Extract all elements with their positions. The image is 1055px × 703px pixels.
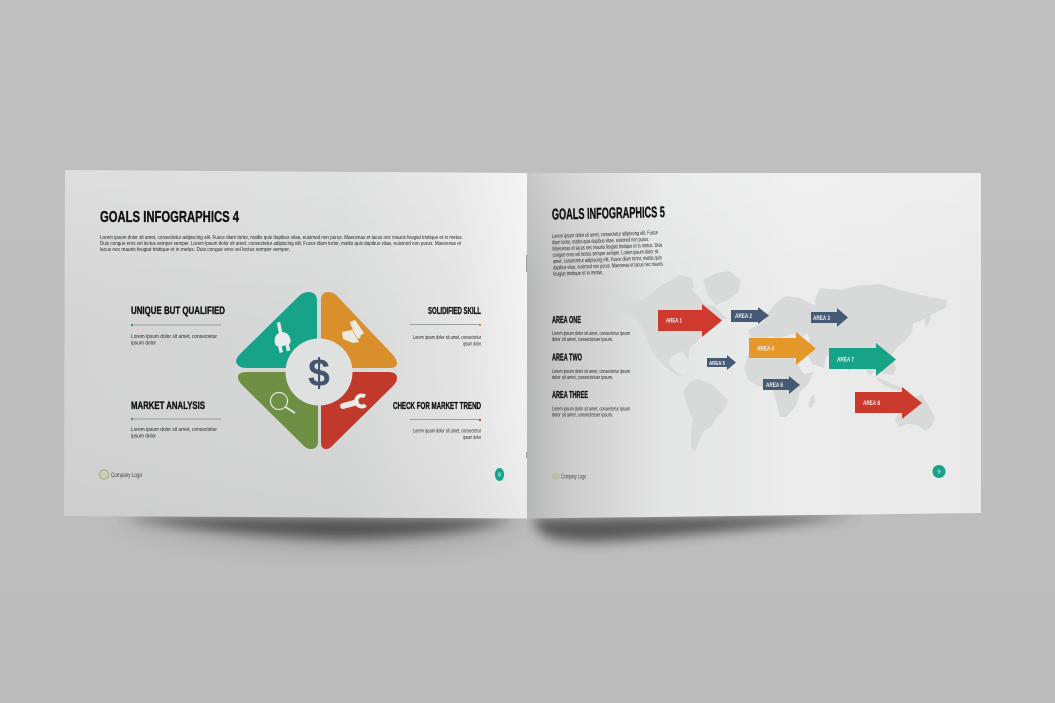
diamond chart (236, 292, 397, 449)
intro paragraph right: congue eros vel lectus semper semper. Lorem ipsum dolor sit (553, 249, 659, 259)
footer logo right (552, 472, 586, 480)
intro paragraph right: diam tortor, mattis quis dapibus vitae, euismod non purus. (552, 237, 649, 246)
heading: goals infographics 5: GOALS INFOGRAPHICS 5 (552, 204, 665, 223)
africa (744, 344, 814, 417)
block: check for market trend (393, 400, 481, 441)
block: area one (552, 314, 630, 343)
block: area one: dolor sit amet, consectetuer ipsum. (552, 337, 613, 343)
arrow: area 6: AREA 6 (766, 383, 784, 389)
north america (608, 288, 726, 377)
arrow: area 2 (731, 307, 769, 324)
arrow: area 7: AREA 7 (837, 358, 855, 364)
book shadow (110, 515, 860, 543)
page number badge left: 8 (498, 472, 501, 478)
europe (748, 296, 826, 342)
canadian arctic (648, 275, 694, 298)
intro paragraph left: Duis congue eros vel lectus semper semper. Lorem ipsum dolor sit amet, consectetur adipiscing elit. Fusce diam tortor, mattis quis dapibus vitae, euismod non purus. Maecenas et (100, 241, 461, 247)
icon: binoculars (342, 320, 364, 343)
block: area two: Lorem ipsum dolor sit amet, consectetur ipsum (552, 369, 630, 375)
greenland (703, 271, 741, 305)
icon: dollar sign: $ (308, 352, 330, 395)
block: solidified skill: ipsum dolor (463, 342, 481, 348)
arrow: area 8 (855, 387, 922, 419)
arrow: area 2: AREA 2 (735, 314, 753, 320)
block: area three: dolor sit amet, consectetuer ipsum. (552, 412, 613, 418)
block: area three (552, 389, 630, 418)
arrow: area 7 (829, 343, 896, 376)
heading: goals infographics 4: GOALS INFOGRAPHICS 4 (100, 209, 239, 226)
block: area one: Lorem ipsum dolor sit amet, consectetur ipsum (552, 331, 630, 337)
page number badge left (495, 468, 504, 481)
spine binding marks (525, 255, 528, 458)
intro paragraph right: feugiat tristique et in metus. (553, 270, 604, 278)
panel: left page (64, 170, 527, 518)
block: check for market trend: Lorem ipsum dolor sit amet, consectetur (413, 428, 481, 434)
world map (608, 271, 947, 452)
segment: green magnifier (238, 372, 318, 449)
australia (895, 394, 935, 431)
indonesia (874, 376, 910, 392)
page number badge right (932, 465, 946, 478)
intro paragraph right: Lorem ipsum dolor sit amet, consectetur adipiscing elit. Fusce (552, 230, 658, 240)
madagascar (808, 395, 815, 408)
arrow: area 8: AREA 8 (863, 401, 881, 407)
arrow: area 3: AREA 3 (813, 316, 831, 322)
arrow: area 5: AREA 5 (709, 361, 725, 367)
block: area one: AREA ONE (552, 314, 581, 326)
icon: magnifier (270, 392, 295, 413)
block: check for market trend: ipsum dolor (463, 435, 481, 441)
intro paragraph right: Maecenas et lacus nec mauris feugiat tristique et in metus. Duis (552, 243, 663, 253)
block: area two (552, 352, 630, 381)
block: area three: AREA THREE (552, 389, 588, 401)
icon: wrench (343, 395, 366, 406)
segment: orange binoculars (321, 292, 397, 368)
footer logo right: Company Logo (561, 474, 586, 480)
block: area two: AREA TWO (552, 352, 582, 364)
intro paragraph left: Lorem ipsum dolor sit amet, consectetur adipiscing elit. Fusce diam tortor, mattis quis dapibus vitae, euismod non purus. Maecenas et lacus nec mauris feugiat tristique et in metus. (100, 235, 463, 241)
south america (683, 379, 728, 452)
intro paragraph left: lacus nec mauris feugiat tristique et in metus. Duis congue eros vel lectus semper semper. (100, 247, 290, 253)
block: solidified skill (410, 305, 481, 348)
block: market analysis: MARKET ANALYSIS (131, 400, 205, 412)
arrow: area 4: AREA 4 (757, 346, 775, 352)
arrow: area 3 (811, 308, 848, 327)
footer logo left (99, 470, 142, 479)
block: check for market trend: CHECK FOR MARKET TREND (393, 400, 481, 412)
block: solidified skill: SOLIDIFIED SKILL (428, 305, 481, 317)
arrow: area 6 (763, 376, 800, 394)
intro paragraph right (552, 230, 663, 278)
block: solidified skill: Lorem ipsum dolor sit amet, consectetur (413, 335, 481, 341)
icon: plug (271, 321, 293, 353)
block: unique but qualified (131, 305, 225, 346)
intro paragraph left (100, 235, 463, 253)
center circle (286, 338, 352, 406)
segment: red wrench (321, 372, 397, 449)
arrow: area 1: AREA 1 (666, 318, 682, 324)
arrow: area 4 (749, 332, 816, 365)
block: unique but qualified: Lorem ipsum dolor sit amet, consectetur (131, 334, 217, 340)
block: market analysis: ipsum dolor (131, 434, 156, 440)
intro paragraph right: amet, consectetur adipiscing elit. Fusce diam tortor, mattis quis (553, 255, 662, 265)
block: market analysis (131, 400, 221, 440)
block: area three: Lorem ipsum dolor sit amet, consectetur ipsum (552, 406, 630, 412)
panel: right page (527, 173, 981, 518)
page number badge right: 9 (937, 470, 941, 476)
japan (925, 314, 931, 328)
footer logo left: Company Logo (111, 473, 142, 479)
intro paragraph right: dapibus vitae, euismod non purus. Maecenas et lacus nec mauris (553, 262, 663, 271)
block: market analysis: Lorem ipsum dolor sit amet, consectetur (131, 427, 217, 433)
asia (806, 284, 947, 376)
block: unique but qualified: ipsum dolor (131, 340, 156, 346)
block: area two: dolor sit amet, consectetuer ipsum. (552, 375, 613, 381)
arrow: area 1 (658, 304, 722, 337)
arrow: area 5 (707, 355, 736, 370)
block: unique but qualified: UNIQUE BUT QUALIFIED (131, 305, 225, 317)
segment: teal plug (236, 292, 317, 368)
